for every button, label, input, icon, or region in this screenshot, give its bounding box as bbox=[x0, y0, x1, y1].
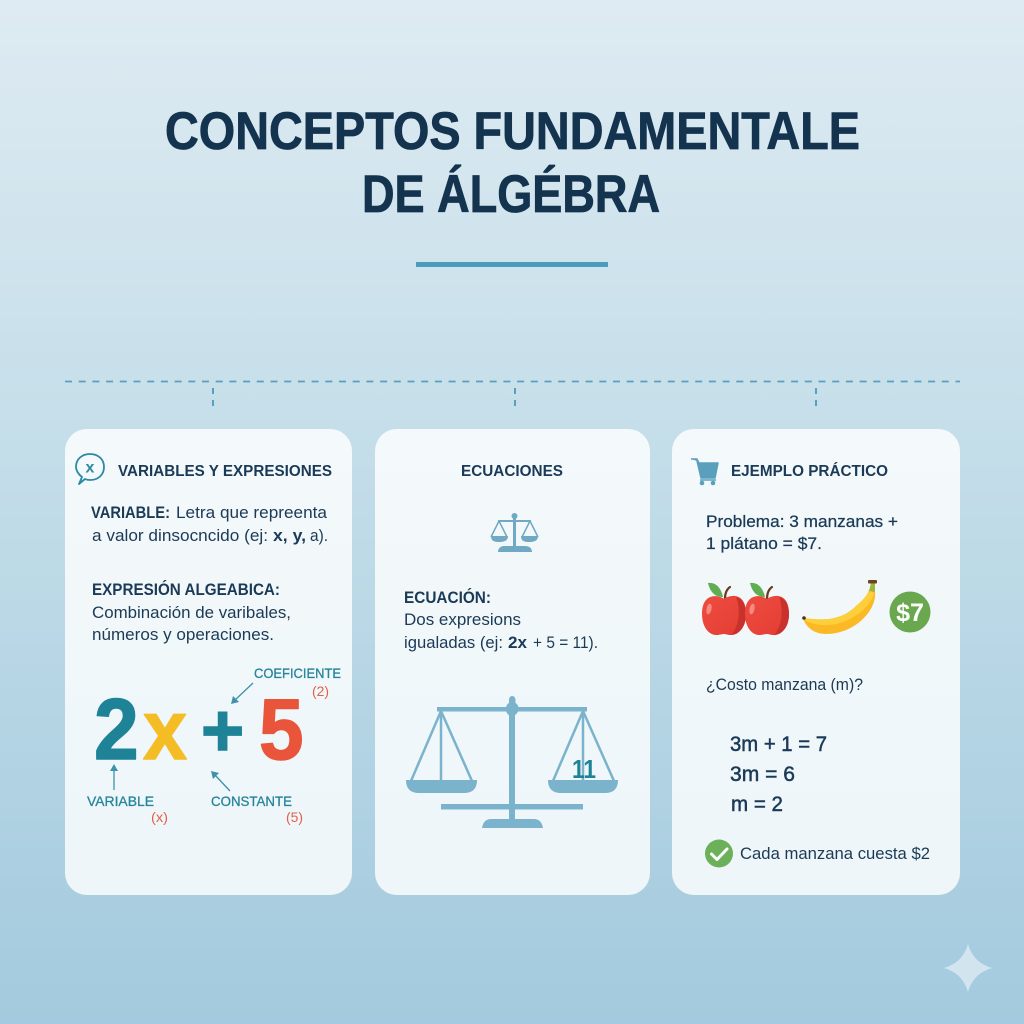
formula 2x + 5 bbox=[94, 682, 304, 778]
text: problema bbox=[706, 512, 898, 553]
arrow: constante bbox=[211, 771, 230, 791]
title: DE ÁLGÉBRA bbox=[362, 164, 660, 224]
text: definicion de variable: a). bbox=[310, 526, 328, 545]
label: coeficiente: COEFICIENTE bbox=[254, 665, 341, 681]
panel: ejemplo practico bbox=[672, 429, 960, 895]
heading: ejemplo practico: EJEMPLO PRÁCTICO bbox=[731, 461, 888, 480]
formula 2x + 5: x bbox=[143, 683, 187, 777]
text: definicion de ecuacion: Dos expresions bbox=[404, 610, 521, 629]
icon: check bbox=[705, 840, 733, 868]
text: definicion de ecuacion: igualadas (ej: bbox=[404, 633, 503, 652]
text: definicion de variable: VARIABLE: bbox=[91, 503, 170, 522]
text: definicion de expresion: números y operaciones. bbox=[92, 625, 274, 644]
text: definicion de variable: a valor dinsocncido (ej: bbox=[92, 526, 268, 545]
title: CONCEPTOS FUNDAMENTALE bbox=[165, 102, 860, 161]
formula 2x + 5: 2 bbox=[94, 682, 139, 778]
icon: price badge: $7 bbox=[896, 599, 924, 627]
icon: large balance scale bbox=[406, 696, 618, 828]
formula 2x + 5: 5 bbox=[259, 682, 304, 778]
text: definicion de ecuacion: 2x bbox=[508, 633, 528, 652]
heading: ecuaciones: ECUACIONES bbox=[461, 463, 563, 480]
text: problema: 1 plátano = $7. bbox=[706, 534, 822, 553]
icon: speech bubble x bbox=[76, 454, 104, 484]
text: resultado: Cada manzana cuesta $2 bbox=[740, 844, 930, 863]
text: pregunta: ¿Costo manzana (m)? bbox=[706, 675, 863, 694]
title bbox=[165, 102, 860, 224]
icon: apple 2 bbox=[745, 583, 789, 635]
arrow: variable bbox=[110, 764, 118, 790]
text: definicion de expresion bbox=[92, 580, 291, 644]
text: definicion de ecuacion bbox=[404, 588, 598, 652]
heading: variables y expresiones: VARIABLES Y EXPRESIONES bbox=[118, 463, 332, 480]
label: coeficiente: (2) bbox=[312, 683, 329, 699]
formula 2x + 5: + bbox=[201, 689, 244, 772]
arrow: coeficiente bbox=[231, 683, 253, 704]
text: definicion de ecuacion: + 5 = 11). bbox=[533, 633, 598, 652]
label: variable bbox=[87, 793, 168, 825]
label: variable: (x) bbox=[151, 809, 168, 825]
icon: apple 1 bbox=[702, 583, 746, 635]
text: definicion de variable: Letra que repreenta bbox=[176, 503, 328, 522]
text: solucion: m = 2 bbox=[731, 793, 783, 816]
icon: price badge bbox=[890, 592, 930, 632]
label: constante: CONSTANTE bbox=[211, 793, 292, 809]
panel: variables y expresiones bbox=[65, 429, 352, 895]
icon: banana bbox=[802, 580, 877, 634]
text: definicion de variable: x, y, bbox=[273, 526, 306, 545]
icon: speech bubble x: x bbox=[86, 460, 95, 476]
label: variable: VARIABLE bbox=[87, 793, 154, 809]
icon: small scale bbox=[491, 513, 538, 552]
label: coeficiente bbox=[254, 665, 341, 699]
text: definicion de expresion: Combinación de varibales, bbox=[92, 603, 291, 622]
value 11: 11 bbox=[572, 754, 596, 784]
panel: ecuaciones bbox=[375, 429, 650, 895]
text: solucion bbox=[730, 733, 827, 816]
text: solucion: 3m + 1 = 7 bbox=[730, 733, 827, 756]
label: constante bbox=[211, 793, 303, 825]
label: constante: (5) bbox=[286, 809, 303, 825]
text: problema: Problema: 3 manzanas + bbox=[706, 512, 898, 531]
text: definicion de ecuacion: ECUACIÓN: bbox=[404, 588, 491, 607]
icon: sparkle bbox=[944, 944, 992, 992]
text: definicion de expresion: EXPRESIÓN ALGEABICA: bbox=[92, 580, 280, 599]
text: definicion de variable bbox=[91, 503, 328, 545]
icon: shopping cart bbox=[691, 459, 718, 485]
text: solucion: 3m = 6 bbox=[730, 763, 795, 786]
